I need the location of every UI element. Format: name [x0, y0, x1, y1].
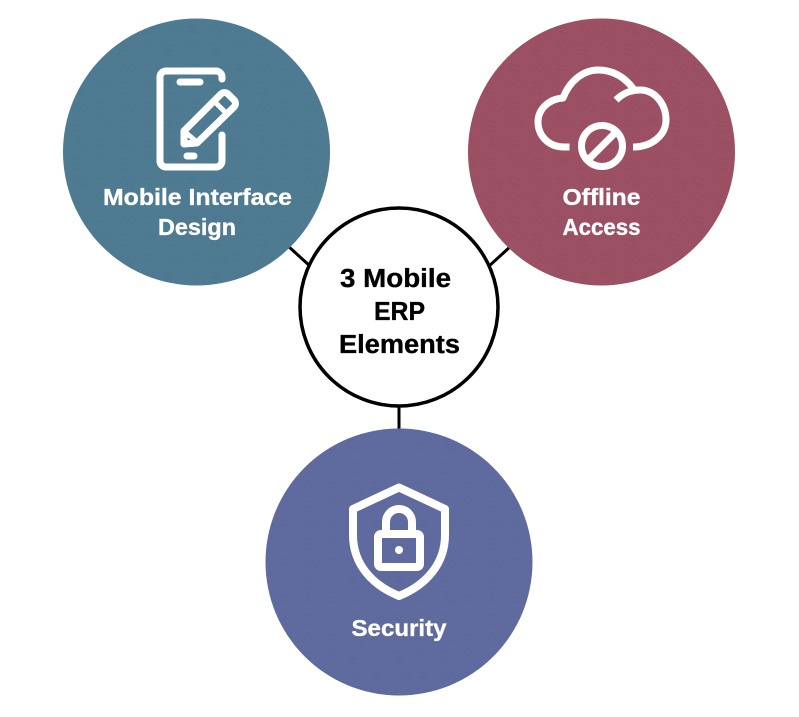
panel: centre circle [300, 208, 498, 406]
heading: 3 Mobile ERP Elements: 3 Mobile [340, 265, 451, 293]
connector: mobile interface design to centre [288, 246, 311, 267]
icon: padlock keyhole [395, 546, 403, 554]
label: Security: Security [352, 615, 447, 641]
connector: security to centre [398, 405, 400, 432]
label: Offline Access: Access [562, 214, 640, 240]
connector: offline access to centre [488, 246, 511, 267]
panel: mobile interface design [63, 18, 330, 286]
icon: cloud with ban sign [538, 70, 666, 166]
icon: phone with pencil [160, 71, 235, 167]
label: Offline Access: Offline [562, 184, 640, 210]
heading: 3 Mobile ERP Elements: ERP [374, 298, 425, 326]
panel: security [266, 428, 532, 696]
icon: shield with padlock [353, 488, 445, 596]
label: Mobile Interface Design: Mobile Interface [103, 184, 292, 210]
label: Mobile Interface Design: Design [158, 214, 236, 240]
heading: 3 Mobile ERP Elements: Elements [339, 331, 460, 359]
panel: offline access [468, 18, 735, 286]
